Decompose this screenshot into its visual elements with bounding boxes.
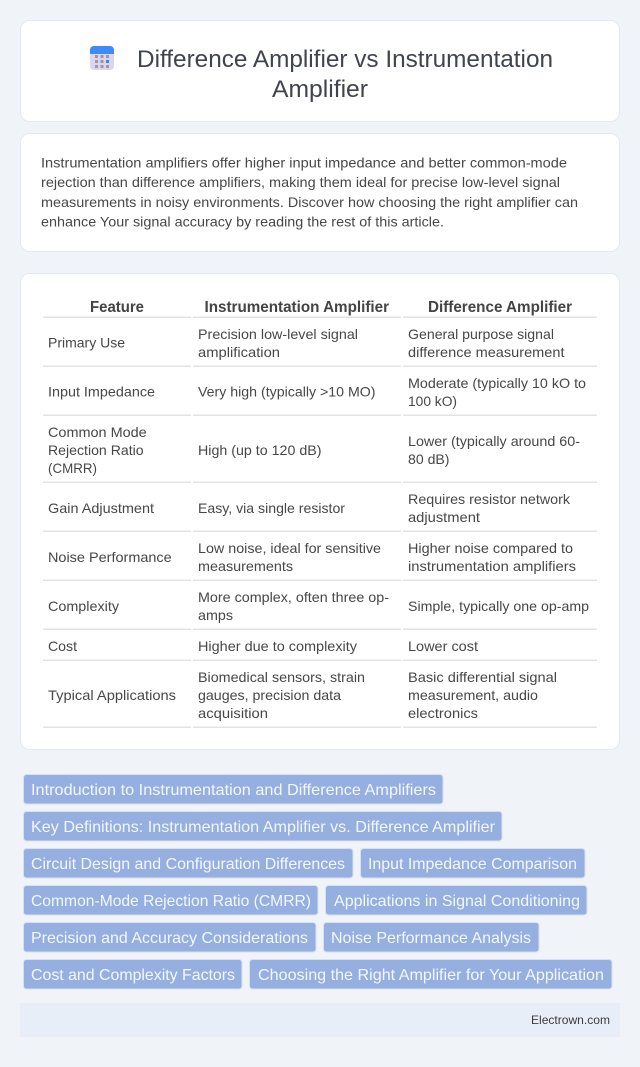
intro text: enhance Your signal accuracy by reading the rest of this article. [41,214,444,230]
tag: precision [24,922,316,952]
row: gain adjustment [43,491,597,532]
row: cost [43,638,597,661]
row: primary use [43,326,597,367]
row: common mode rejection ratio: Lower (typically around 60- [408,433,580,449]
tag: applications: Applications in Signal Conditioning [334,893,580,910]
title: Amplifier [272,76,368,103]
row: common mode rejection ratio: (CMRR) [48,460,97,476]
row: gain adjustment: Easy, via single resistor [198,500,345,516]
table header row: Difference Amplifier [428,299,572,316]
tag: precision: Precision and Accuracy Considerations [31,930,308,947]
row: primary use: Precision low-level signal [198,326,358,342]
panel: comparison table [20,274,620,750]
row: complexity: More complex, often three op- [198,589,389,605]
row: input impedance: Input Impedance [48,384,155,400]
table header row [43,299,597,318]
table header row: Instrumentation Amplifier [204,299,389,316]
row: common mode rejection ratio: 80 dB) [408,451,450,467]
row: complexity: Complexity [48,598,119,614]
panel: introduction [20,134,620,252]
tag: cost [24,960,242,989]
row: gain adjustment: Gain Adjustment [48,500,154,516]
row: gain adjustment: Requires resistor network [408,491,571,507]
row: typical applications: electronics [408,705,478,721]
row: typical applications: Basic differential signal [408,669,557,685]
row: typical applications [43,669,597,728]
tag: CMRR [24,886,318,915]
row: input impedance: Moderate (typically 10 kO to [408,375,586,391]
title [137,46,553,103]
title: Difference Amplifier vs Instrumentation [137,46,553,73]
row: common mode rejection ratio [43,424,597,483]
tag: applications [326,886,587,915]
tag: input impedance: Input Impedance Comparison [368,856,577,873]
row: complexity: amps [198,607,233,623]
tag: circuit design: Circuit Design and Configuration Differences [31,856,345,873]
tag: choosing: Choosing the Right Amplifier for Your Application [258,967,604,984]
row: complexity [43,589,597,630]
row: primary use: difference measurement [408,344,565,360]
tag: cost: Cost and Complexity Factors [31,967,235,984]
row: primary use: amplification [198,344,280,360]
panel: header [20,20,620,122]
row: typical applications: measurement, audio [408,687,538,703]
row: cost: Cost [48,638,77,654]
row: primary use: Primary Use [48,334,125,350]
tag: noise: Noise Performance Analysis [331,930,531,947]
row: noise performance: Low noise, ideal for sensitive [198,540,381,556]
row: common mode rejection ratio: Common Mode [48,424,147,440]
tag: key definitions: Key Definitions: Instrumentation Amplifier vs. Difference Amplifier [31,819,496,836]
tag: key definitions [24,812,502,841]
tag: CMRR: Common-Mode Rejection Ratio (CMRR) [31,893,311,910]
row: noise performance [43,540,597,581]
row: typical applications: gauges, precision data [198,687,341,703]
row: typical applications: Typical Applications [48,687,176,703]
tag: introduction [24,774,443,804]
row: typical applications: acquisition [198,705,268,721]
tag: choosing [250,960,612,989]
intro text: Instrumentation amplifiers offer higher input impedance and better common-mode [41,154,567,170]
row: input impedance: Very high (typically >10 MO) [198,384,376,400]
intro text [41,154,578,230]
intro text: measurements in noisy environments. Discover how choosing the right amplifier can [41,194,578,210]
row: noise performance: Higher noise compared to [408,540,573,556]
row: input impedance: 100 kO) [408,393,457,409]
row: noise performance: instrumentation amplifiers [408,558,576,574]
row: cost: Lower cost [408,638,478,654]
row: input impedance [43,375,597,416]
tag list: article sections [24,774,612,989]
row: noise performance: Noise Performance [48,549,172,565]
row: primary use: General purpose signal [408,326,554,342]
tag: introduction: Introduction to Instrumentation and Difference Amplifiers [31,782,436,799]
table header row: Feature [90,299,144,316]
tag: noise [324,922,539,952]
intro text: rejection than difference amplifiers, making them ideal for precise low-level signal [41,174,560,190]
row: noise performance: measurements [198,558,293,574]
tag: input impedance [360,848,585,878]
row: gain adjustment: adjustment [408,509,480,525]
footer [20,1003,620,1037]
row: common mode rejection ratio: High (up to 120 dB) [198,442,322,458]
row: cost: Higher due to complexity [198,638,357,654]
icon: calendar [90,46,114,70]
row: complexity: Simple, typically one op-amp [408,598,589,614]
footer: Electrown.com [531,1013,610,1027]
tag: circuit design [24,848,353,878]
row: common mode rejection ratio: Rejection Ratio [48,442,144,458]
row: typical applications: Biomedical sensors, strain [198,669,365,685]
